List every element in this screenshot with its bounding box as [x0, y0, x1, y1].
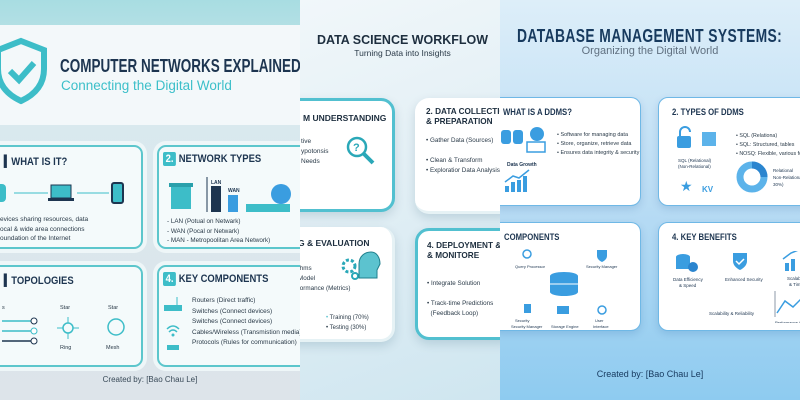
card 2: [415, 98, 515, 214]
list: Routers (Direct traffic): [192, 297, 255, 304]
heading: [427, 241, 500, 260]
diagram: [511, 249, 618, 329]
panel: computer networks: [0, 0, 302, 400]
legend: • Testing (30%): [326, 325, 366, 331]
list: [192, 297, 302, 346]
list: Switches (Connect devices): [192, 308, 272, 314]
diagram: User: [595, 318, 604, 323]
icons: [673, 251, 800, 323]
title: DATABASE MANAGEMENT SYSTEMS:: [517, 26, 782, 46]
icons: & Speed: [679, 283, 697, 288]
list: • Ensures data integrity & security: [557, 150, 639, 156]
card: key benefits: [658, 222, 800, 331]
text: [301, 138, 328, 165]
list: • SQL (Relationa): [736, 133, 777, 139]
list: • Exploratior Data Analysis: [426, 167, 500, 174]
diagrams: Mesh: [106, 345, 119, 351]
list: • Clean & Transform: [426, 157, 482, 164]
card: topologies: [0, 265, 143, 367]
card 4: [415, 228, 515, 340]
icon: gears head: [342, 252, 380, 280]
card 1: [280, 98, 395, 212]
icons: Scalability & Reliability: [709, 311, 755, 316]
card: network types: [157, 145, 317, 249]
heading: 4. KEY BENEFITS: [672, 232, 737, 242]
heading: & PREPARATION: [426, 117, 493, 126]
chart: LAN WAN: LAN: [211, 180, 222, 186]
heading: 2. TYPES OF DDMS: [672, 107, 744, 117]
heading: 2. NETWORK TYPES: [166, 153, 261, 165]
footer: Created by: [Bao Chau Le]: [597, 369, 703, 379]
icons: devices: [0, 182, 124, 204]
heading: & MONITORE: [427, 251, 479, 260]
list: • Track-time Predictions: [427, 300, 493, 307]
icons: Data Efficiency: [673, 277, 704, 282]
chart: LAN WAN: [169, 177, 291, 212]
panel: database management systems: [500, 0, 800, 400]
footer: Created by: [Bao Chau Le]: [103, 375, 197, 384]
heading: 4. DEPLOYMENT &: [427, 241, 500, 250]
diagram: Storage Engine: [551, 324, 579, 329]
title: DATA SCIENCE WORKFLOW: [317, 32, 488, 47]
card 3: [280, 227, 395, 342]
subtitle: Turning Data into Insights: [354, 48, 451, 58]
text: evices sharing resources, data: [0, 216, 88, 223]
diagrams: s: [2, 305, 5, 311]
diagrams: Star: [108, 305, 118, 311]
card: what is a ddms: [490, 97, 641, 206]
icon: shield: [0, 38, 47, 104]
diagram: Security: [515, 318, 529, 323]
icons: (Non-Relational): [678, 164, 711, 169]
heading: 4. KEY COMPONENTS: [166, 273, 268, 285]
donut chart: 30%): [773, 182, 784, 187]
card: what is it: [0, 145, 143, 249]
text: ypotonsis: [301, 148, 328, 155]
list: Protocols (Rules for communication): [192, 339, 297, 346]
icons: [677, 126, 716, 194]
icon: magnifier: [346, 136, 374, 164]
header band: [0, 25, 302, 125]
heading: M UNDERSTANDING: [303, 113, 386, 123]
diagrams: Star: [60, 305, 70, 311]
text: [0, 216, 88, 242]
heading: WHAT IS A DDMS?: [503, 107, 572, 117]
icons: [501, 127, 546, 192]
text: oundation of the Internet: [0, 235, 70, 242]
diagram: Security Manager: [586, 264, 618, 269]
diagram: Query Processor: [515, 264, 546, 269]
list: Cables/Wireless (Transmistion media): [192, 328, 302, 336]
list: [557, 132, 640, 156]
list: • Software for managing data: [557, 132, 628, 138]
diagram: Security Manager: [511, 324, 543, 329]
icons: SQL (Relational): [678, 158, 712, 163]
icons: Enhanced Security: [725, 277, 764, 282]
title: COMPUTER NETWORKS EXPLAINED: [60, 56, 301, 76]
donut chart: Relational: [773, 168, 793, 173]
diagrams: Ring: [60, 345, 71, 351]
heading: ▍WHAT IS IT?: [4, 156, 67, 168]
text: Needs: [301, 158, 320, 165]
legend: • Training (70%): [326, 315, 369, 321]
heading: G & EVALUATION: [300, 238, 369, 248]
donut chart: [736, 162, 800, 192]
diagrams: [2, 305, 125, 351]
text: - WAN (Pocal or Netwark): [167, 228, 239, 234]
legend: [326, 314, 369, 331]
list: [426, 137, 500, 174]
list: (Feedback Loop): [430, 310, 478, 317]
subtitle: Organizing the Digital World: [582, 45, 718, 57]
list: [736, 133, 800, 157]
diagram: Interface: [593, 324, 609, 329]
card: types: [658, 97, 800, 206]
list: Switches (Connect devices): [192, 318, 272, 325]
text: ocal & wide area connections: [0, 226, 85, 232]
icon: magnifier: ?: [353, 142, 360, 154]
text: [300, 265, 350, 292]
list: • Store, organize, retrieve data: [557, 141, 631, 147]
text: - MAN - Metropoolitan Area Network): [167, 237, 270, 244]
list: • Gather Data (Sources): [426, 137, 493, 144]
text: - LAN (Potual on Netwark): [167, 218, 240, 225]
list: • Integrate Solution: [427, 280, 480, 287]
list: • SQL: Structured, tables: [736, 142, 794, 148]
subtitle: Connecting the Digital World: [61, 78, 232, 93]
card: key components: [157, 265, 317, 367]
icons: Data Growth: [507, 162, 537, 168]
text: tive: [301, 138, 311, 145]
heading: COMPONENTS: [504, 232, 559, 242]
list: [427, 280, 494, 317]
text: [167, 218, 270, 244]
icons: ★: [680, 178, 693, 194]
panel: data science workflow: [300, 0, 500, 400]
chart: LAN WAN: WAN: [228, 188, 240, 194]
icons: [164, 297, 182, 350]
icons: KV: [702, 185, 714, 194]
heading: [426, 107, 500, 126]
heading: ▍TOPOLOGIES: [4, 275, 74, 287]
card: components: [490, 222, 641, 331]
